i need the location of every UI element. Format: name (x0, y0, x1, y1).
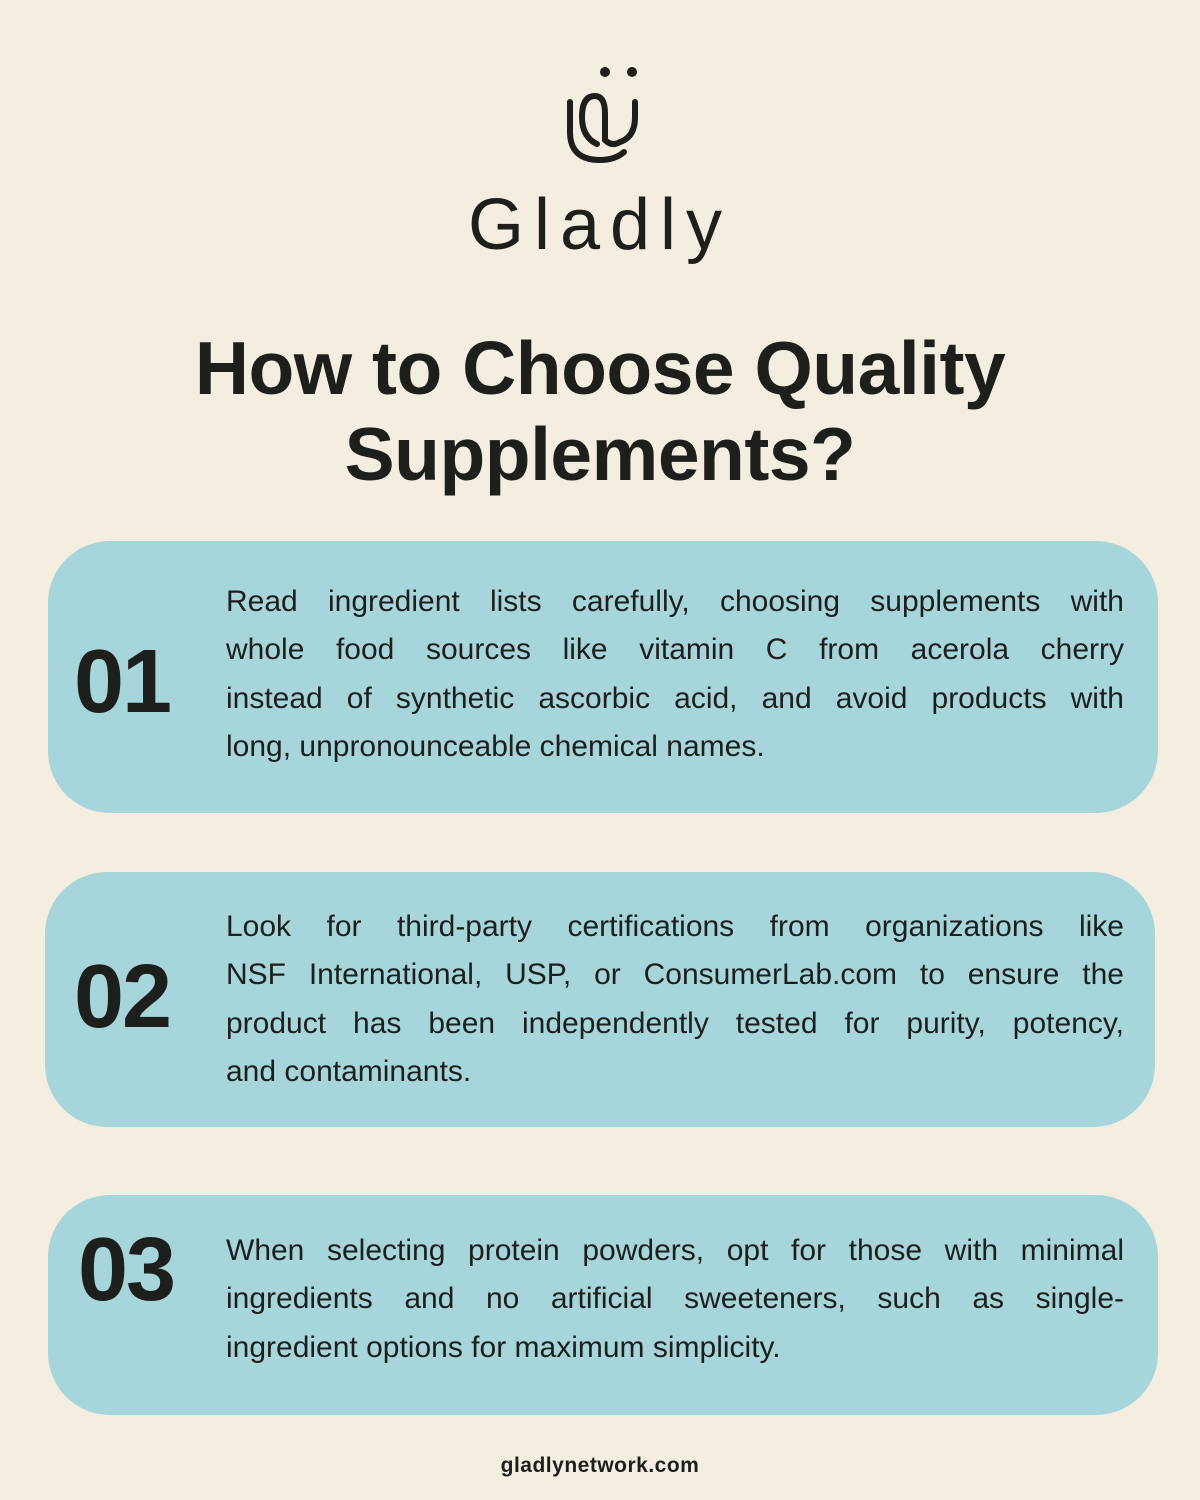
text 03: ingredients and no artificial sweeteners, such as single- (226, 1282, 1124, 1315)
title: Supplements? (345, 412, 855, 496)
text 03 (226, 1234, 1124, 1364)
text 02: and contaminants. (226, 1055, 471, 1088)
panel: step 03 (48, 1195, 1158, 1415)
text 02: Look for third-party certifications from organizations like (226, 910, 1124, 943)
text 03: ingredient options for maximum simplicity. (226, 1331, 781, 1364)
text 03: When selecting protein powders, opt for those with minimal (226, 1234, 1124, 1267)
text 01 (226, 585, 1124, 763)
title: How to Choose Quality (195, 326, 1005, 410)
logo icon (567, 67, 638, 163)
text 01: Read ingredient lists carefully, choosing supplements with (226, 585, 1124, 618)
text 01: instead of synthetic ascorbic acid, and avoid products with (226, 682, 1124, 715)
text 02: NSF International, USP, or ConsumerLab.com to ensure the (226, 958, 1124, 991)
text 02: product has been independently tested for purity, potency, (226, 1007, 1124, 1040)
panel: step 01 (48, 541, 1158, 813)
panel: step 02 (45, 872, 1155, 1127)
text 01: whole food sources like vitamin C from acerola cherry (226, 633, 1124, 666)
title (195, 326, 1006, 496)
footer url: gladlynetwork.com (501, 1454, 699, 1477)
text 01: long, unpronounceable chemical names. (226, 730, 765, 763)
text 02 (226, 910, 1124, 1088)
number 02: 02 (74, 947, 170, 1047)
number 01: 01 (74, 632, 170, 732)
number 03: 03 (78, 1220, 174, 1320)
brand name: Gladly (468, 185, 732, 265)
